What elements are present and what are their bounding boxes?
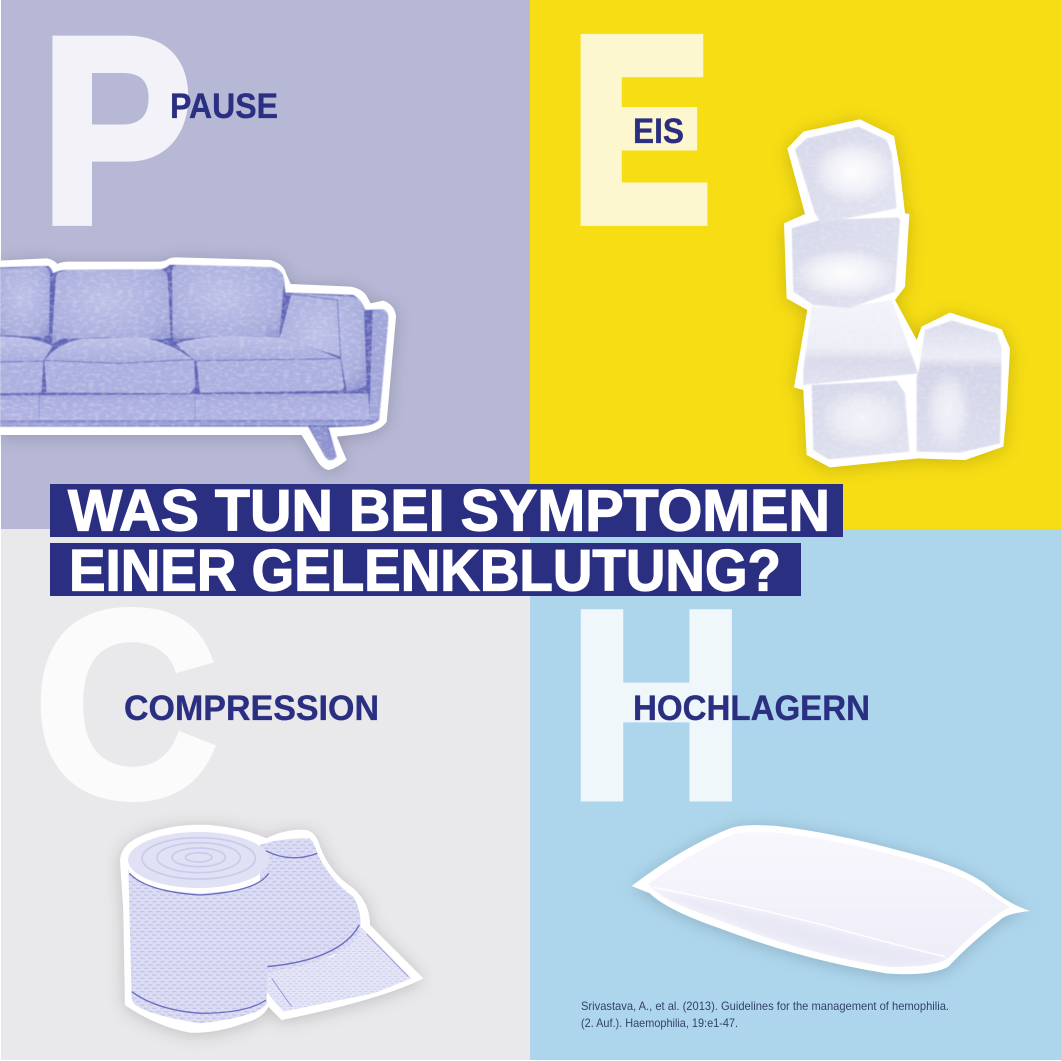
image: sofa: [0, 257, 396, 470]
image: bandage roll: [120, 825, 423, 1033]
label: pause: PAUSE: [170, 87, 278, 126]
source reference: Srivastava, A., et al. (2013). Guidelines for the management of hemophilia.: [581, 999, 949, 1013]
sofa leg: [309, 427, 337, 460]
label: compression: COMPRESSION: [124, 689, 379, 728]
cube third: [803, 300, 918, 385]
cube bottom: [812, 381, 909, 459]
bandage roll body: [128, 868, 269, 1023]
right armrest cushion: [280, 293, 367, 391]
label: eis: EIS: [633, 112, 684, 151]
big letter C: C: [32, 554, 220, 854]
bandage roll top: [128, 832, 269, 888]
title banner: [50, 478, 843, 604]
panel: eis: [530, 0, 1061, 529]
bandage flat strap: [263, 927, 412, 1012]
pillow seam: [653, 887, 945, 957]
big letter H: H: [568, 556, 745, 855]
panel: hochlagern: [530, 529, 1061, 1060]
image: pillow: [632, 825, 1030, 974]
panel: pause: [1, 0, 530, 529]
sofa base: [0, 393, 378, 421]
cube right: [917, 321, 1002, 453]
back cushions: [0, 265, 284, 344]
title line 2: EINER GELENKBLUTUNG?: [69, 538, 781, 604]
source reference: [581, 999, 949, 1030]
image: ice cubes: [784, 119, 1010, 467]
title line 1: WAS TUN BEI SYMPTOMEN: [68, 478, 830, 544]
pillow body: [648, 832, 1010, 967]
cube second: [792, 217, 900, 308]
cube top: [795, 127, 897, 223]
source reference: (2. Auf.). Haemophilia, 19:e1-47.: [581, 1016, 738, 1030]
bandage unrolled loop: [260, 838, 360, 974]
panel: compression: [1, 529, 530, 1060]
sofa side frame: [369, 309, 388, 420]
label: hochlagern: HOCHLAGERN: [633, 689, 870, 728]
seat cushions: [0, 336, 344, 393]
